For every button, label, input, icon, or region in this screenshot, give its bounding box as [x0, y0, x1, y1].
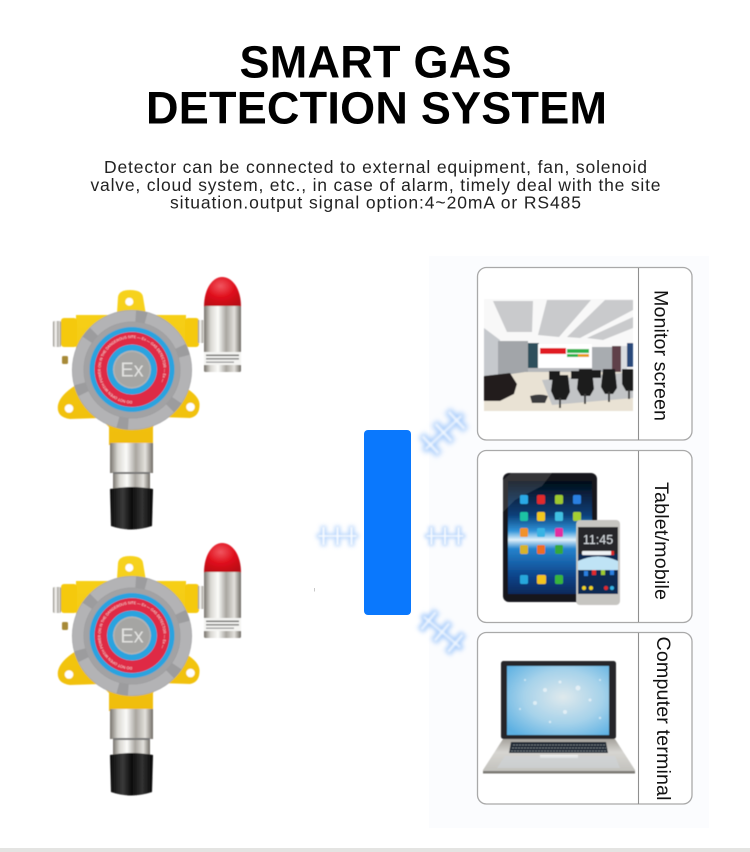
- panel: tablet/mobile: [478, 450, 692, 622]
- tablet: [503, 473, 597, 602]
- label: Monitor screen: [650, 290, 672, 421]
- panel: computer terminal: [478, 632, 692, 804]
- title: SMART GAS: [240, 36, 512, 88]
- description text: situation.output signal option:4~20mA or RS485: [170, 192, 581, 212]
- label: Computer terminal: [652, 636, 674, 800]
- control room photo: [484, 299, 633, 411]
- panel: monitor screen: [478, 268, 692, 440]
- wireless signal: gateway to computer: [414, 606, 470, 658]
- tinted background behind terminals: [429, 256, 709, 828]
- description text: [90, 157, 660, 212]
- wireless signal: gateway to tablet: [425, 526, 465, 546]
- wireless signal: gateway to monitor: [415, 405, 472, 460]
- phone: 11:45: [583, 533, 613, 547]
- title: DETECTION SYSTEM: [146, 82, 607, 134]
- description text: Detector can be connected to external equipment, fan, solenoid: [104, 157, 647, 177]
- wireless signal: detectors to gateway: [316, 526, 358, 546]
- bottom strip: [0, 848, 750, 852]
- gas detector 2: [53, 543, 241, 796]
- label: Tablet/mobile: [650, 482, 672, 600]
- phone: [576, 520, 620, 605]
- gas detector 1: [53, 277, 241, 530]
- description text: valve, cloud system, etc., in case of alarm, timely deal with the site: [90, 175, 660, 195]
- laptop: [483, 661, 635, 774]
- title: [146, 36, 607, 134]
- small mark: [314, 588, 315, 592]
- central blue gateway: [364, 430, 411, 615]
